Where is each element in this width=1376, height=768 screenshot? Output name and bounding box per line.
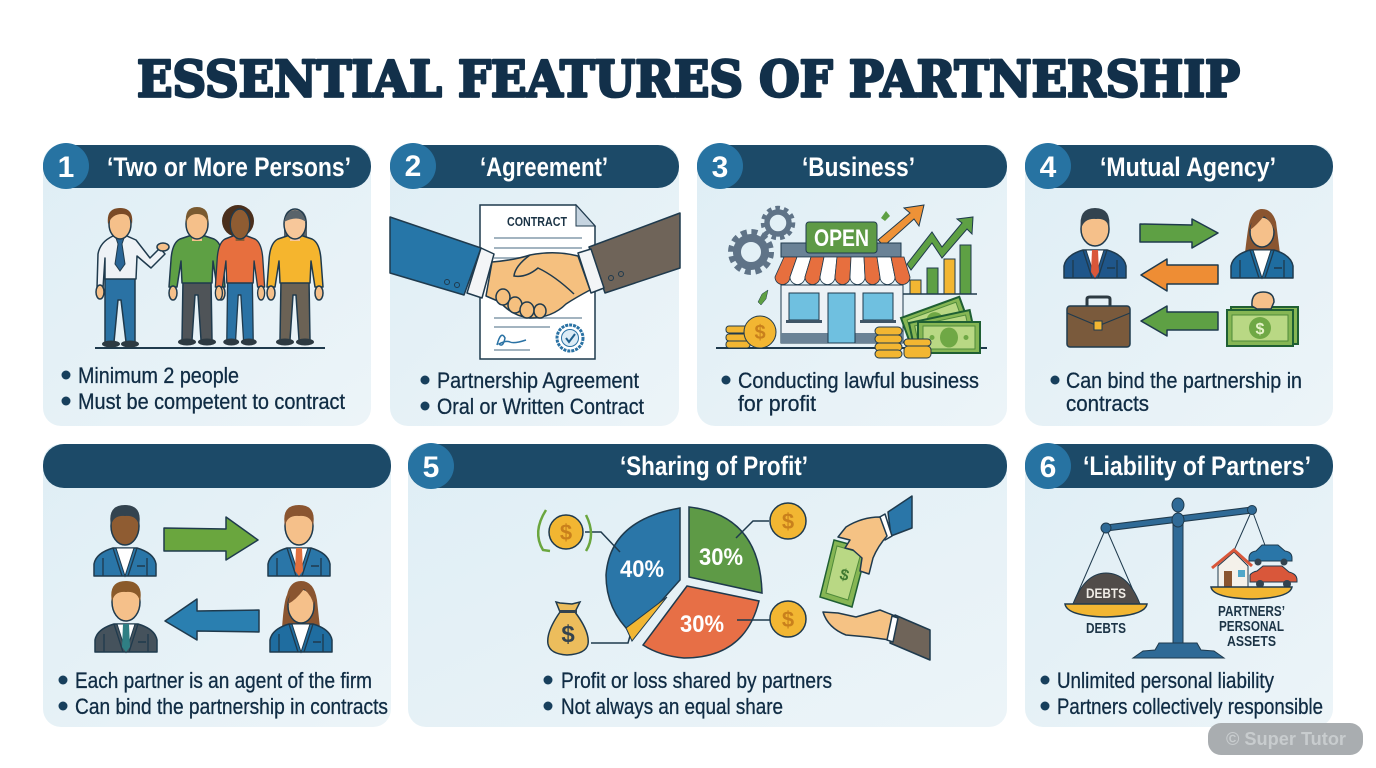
header: mutual agency xyxy=(1025,143,1333,189)
pie chart: 40 30 30: 40% xyxy=(620,556,664,583)
person presenting xyxy=(96,208,169,348)
hands exchanging money xyxy=(820,496,930,660)
illustration: man and woman exchange xyxy=(1064,208,1298,347)
person in orange xyxy=(215,205,265,346)
bullets xyxy=(544,668,832,719)
handshake xyxy=(390,213,680,318)
open sign: OPEN xyxy=(814,225,869,252)
connectors and coins: $ xyxy=(782,607,794,632)
contract document xyxy=(480,205,595,359)
debts pan: DEBTS xyxy=(1086,585,1126,601)
bullets: Minimum 2 people xyxy=(78,363,239,388)
header: liability: 6 xyxy=(1040,451,1056,484)
bullets xyxy=(58,668,388,719)
money bag: $ xyxy=(561,621,575,648)
assets pan: PERSONAL xyxy=(1219,619,1284,635)
assets pan xyxy=(1211,545,1297,650)
bullets xyxy=(1040,668,1323,719)
bullets xyxy=(722,368,979,416)
header: agreement: ‘Agreement’ xyxy=(480,152,608,182)
header: business xyxy=(697,143,1007,189)
bullets xyxy=(62,363,346,414)
header: business: ‘Business’ xyxy=(802,152,915,182)
illustration: partners as agents xyxy=(94,505,332,652)
header: sharing of profit xyxy=(408,443,1007,489)
debts pan xyxy=(1065,573,1147,637)
businesswoman xyxy=(1231,209,1293,278)
briefcase xyxy=(1067,297,1130,347)
connectors and coins: $ xyxy=(560,520,572,545)
balance scale xyxy=(1065,498,1297,658)
illustration: contract and handshake xyxy=(390,205,680,359)
bullets: for profit xyxy=(738,391,817,416)
pie chart: 40 30 30: 30% xyxy=(699,544,743,571)
header: agreement xyxy=(390,143,679,189)
header: two or more persons: 1 xyxy=(58,151,74,184)
header: mutual agency: 4 xyxy=(1040,151,1057,184)
arrow left xyxy=(165,599,259,640)
bullets: Partnership Agreement xyxy=(437,368,640,393)
bullets xyxy=(1050,368,1302,416)
arrow left green xyxy=(1141,306,1218,336)
panel: mutual agency xyxy=(1025,143,1333,426)
assets pan: PARTNERS’ xyxy=(1218,604,1285,620)
bullets: Can bind the partnership in xyxy=(1066,368,1302,393)
arrow right xyxy=(1140,219,1218,248)
money bag xyxy=(548,602,588,655)
contract document: CONTRACT xyxy=(507,214,567,229)
header: sharing of profit: 5 xyxy=(423,451,439,484)
panel: agreement xyxy=(390,143,680,426)
bullets xyxy=(420,368,645,419)
watermark badge xyxy=(1208,723,1363,755)
bullets: Partners collectively responsible xyxy=(1057,694,1323,719)
header: liability xyxy=(1025,443,1333,489)
illustration: shop and growth xyxy=(716,205,987,358)
bullets: Conducting lawful business xyxy=(738,368,979,393)
watermark badge: © Super Tutor xyxy=(1226,729,1346,749)
bullets: Must be competent to contract xyxy=(78,389,346,414)
arrow right xyxy=(164,517,258,560)
header: agreement: 2 xyxy=(405,150,421,183)
growth arrows and bars xyxy=(758,205,977,305)
panel: sharing of profit xyxy=(408,443,1007,727)
partner dark skin xyxy=(94,505,156,576)
panel: two or more persons xyxy=(43,143,371,426)
shop building xyxy=(775,222,910,343)
header: business: 3 xyxy=(712,151,728,184)
header: two or more persons: ‘Two or More Persons’ xyxy=(107,152,351,182)
coins and cash: $ xyxy=(754,322,766,344)
header: mutual agency: ‘Mutual Agency’ xyxy=(1100,152,1276,182)
person in yellow xyxy=(267,209,323,346)
bullets: contracts xyxy=(1066,391,1149,416)
coins and cash xyxy=(726,297,980,358)
person in green xyxy=(169,207,225,346)
header: sharing of profit: ‘Sharing of Profit’ xyxy=(620,451,808,481)
bullets: Oral or Written Contract xyxy=(437,394,645,419)
panel: business xyxy=(697,143,1007,426)
debts pan: DEBTS xyxy=(1086,621,1126,637)
connectors and coins xyxy=(538,503,806,643)
partner dark suit xyxy=(95,581,157,652)
bullets: Not always an equal share xyxy=(561,694,783,719)
bullets: Unlimited personal liability xyxy=(1057,668,1275,693)
assets pan: ASSETS xyxy=(1227,634,1276,650)
businessman xyxy=(1064,208,1126,278)
partner with orange tie xyxy=(268,505,330,576)
gears xyxy=(731,208,793,272)
empty header bar xyxy=(43,444,391,488)
panel: liability of partners xyxy=(1025,443,1333,727)
bullets: Profit or loss shared by partners xyxy=(561,668,832,693)
header: two or more persons xyxy=(43,143,371,189)
pie chart: 40 30 30: 30% xyxy=(680,611,724,638)
title: ESSENTIAL FEATURES OF PARTNERSHIP xyxy=(137,50,1240,109)
arrow left orange xyxy=(1141,259,1218,291)
header: liability: ‘Liability of Partners’ xyxy=(1083,451,1311,481)
connectors and coins: $ xyxy=(782,509,794,534)
hands exchanging money: $ xyxy=(838,566,851,585)
money with hand xyxy=(1227,292,1298,346)
money with hand: $ xyxy=(1256,321,1265,338)
pie chart: 40 30 30 xyxy=(606,507,762,658)
bullets: Each partner is an agent of the firm xyxy=(75,668,372,693)
bullets: Can bind the partnership in contracts xyxy=(75,694,388,719)
panel: agents xyxy=(43,444,391,727)
partner woman xyxy=(270,581,332,652)
illustration: four people xyxy=(95,205,325,348)
